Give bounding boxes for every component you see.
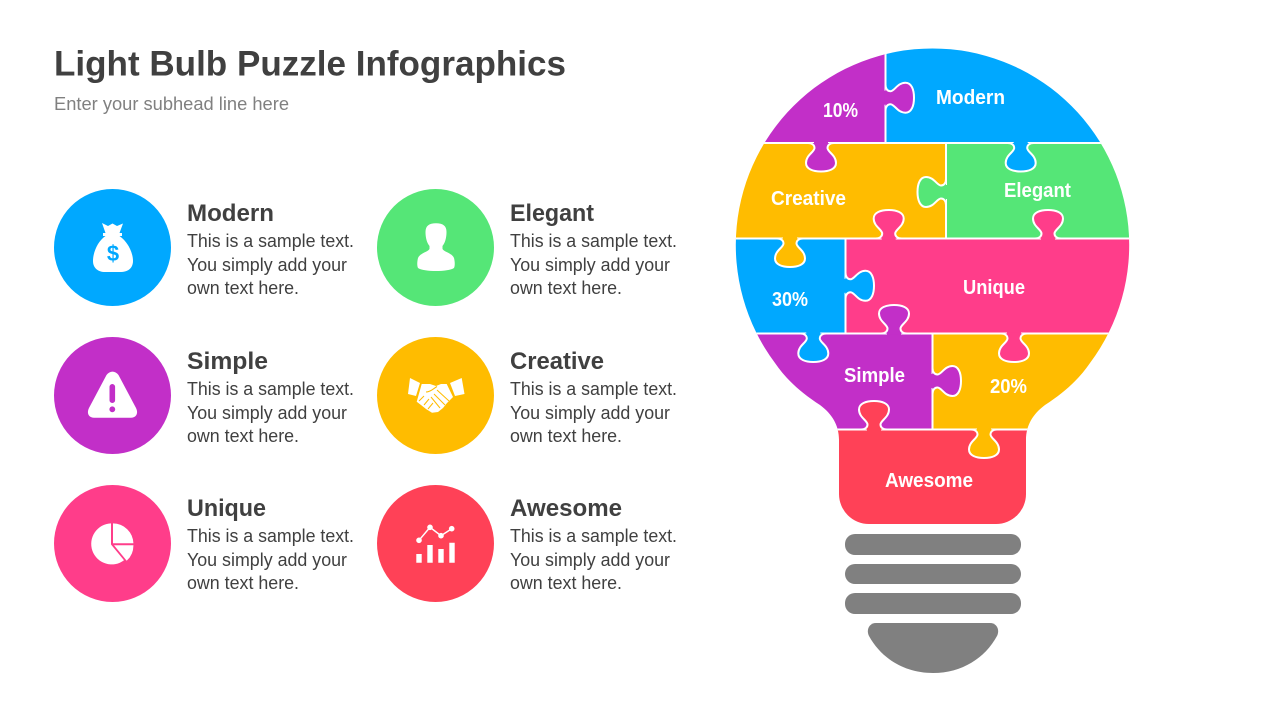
piece labels: 10% <box>823 100 858 122</box>
body text: Simple <box>187 379 354 446</box>
item: Creative <box>377 337 677 454</box>
puzzle pieces <box>736 48 1130 524</box>
body text: Simple: own text here. <box>187 426 299 446</box>
piece labels: Creative <box>771 188 846 210</box>
body text: Modern: own text here. <box>187 278 299 298</box>
piece labels <box>771 87 1071 492</box>
body text: Unique: own text here. <box>187 573 299 593</box>
body text: Elegant <box>510 231 677 298</box>
title: Light Bulb Puzzle Infographics <box>54 44 566 84</box>
body text: Creative: This is a sample text. <box>510 379 677 399</box>
heading: Elegant: Elegant <box>510 200 594 227</box>
subhead: Enter your subhead line here <box>54 93 289 114</box>
body text: Simple: This is a sample text. <box>187 379 354 399</box>
body text: Creative: You simply add your <box>510 403 670 423</box>
heading: Awesome: Awesome <box>510 495 622 522</box>
body text: Creative <box>510 379 677 446</box>
body text: Awesome <box>510 526 677 593</box>
body text: Unique <box>187 526 354 593</box>
heading: Modern: Modern <box>187 200 274 227</box>
icon: warning triangle <box>54 337 171 454</box>
body text: Modern: You simply add your <box>187 255 347 275</box>
icon: money bag <box>54 189 171 306</box>
body text: Unique: You simply add your <box>187 550 347 570</box>
heading: Creative: Creative <box>510 348 604 375</box>
body text: Awesome: You simply add your <box>510 550 670 570</box>
body text: Unique: This is a sample text. <box>187 526 354 546</box>
body text: Modern <box>187 231 354 298</box>
piece labels: Simple <box>844 365 905 387</box>
piece labels: 20% <box>990 376 1027 398</box>
item: Elegant <box>377 189 677 306</box>
puzzle tabs <box>775 83 1063 458</box>
icon: handshake <box>377 337 494 454</box>
item: Modern <box>54 189 354 306</box>
body text: Modern: This is a sample text. <box>187 231 354 251</box>
piece labels: Awesome <box>885 470 973 492</box>
body text: Awesome: own text here. <box>510 573 622 593</box>
body text: Elegant: own text here. <box>510 278 622 298</box>
item: Awesome <box>377 485 677 602</box>
icon: user <box>377 189 494 306</box>
body text: Awesome: This is a sample text. <box>510 526 677 546</box>
body text: Elegant: You simply add your <box>510 255 670 275</box>
body text: Creative: own text here. <box>510 426 622 446</box>
piece labels: 30% <box>772 289 808 311</box>
bulb screw base <box>845 534 1021 673</box>
heading: Unique: Unique <box>187 495 266 522</box>
item: Simple <box>54 337 354 454</box>
piece labels: Modern <box>936 87 1005 109</box>
piece labels: Elegant <box>1004 180 1071 202</box>
icon: bar and line chart <box>377 485 494 602</box>
piece labels: Unique <box>963 277 1025 299</box>
body text: Simple: You simply add your <box>187 403 347 423</box>
icon: pie chart <box>54 485 171 602</box>
icon: money bag: $ <box>107 241 119 266</box>
body text: Elegant: This is a sample text. <box>510 231 677 251</box>
heading: Simple: Simple <box>187 348 268 375</box>
item: Unique <box>54 485 354 602</box>
light bulb puzzle <box>736 48 1130 673</box>
